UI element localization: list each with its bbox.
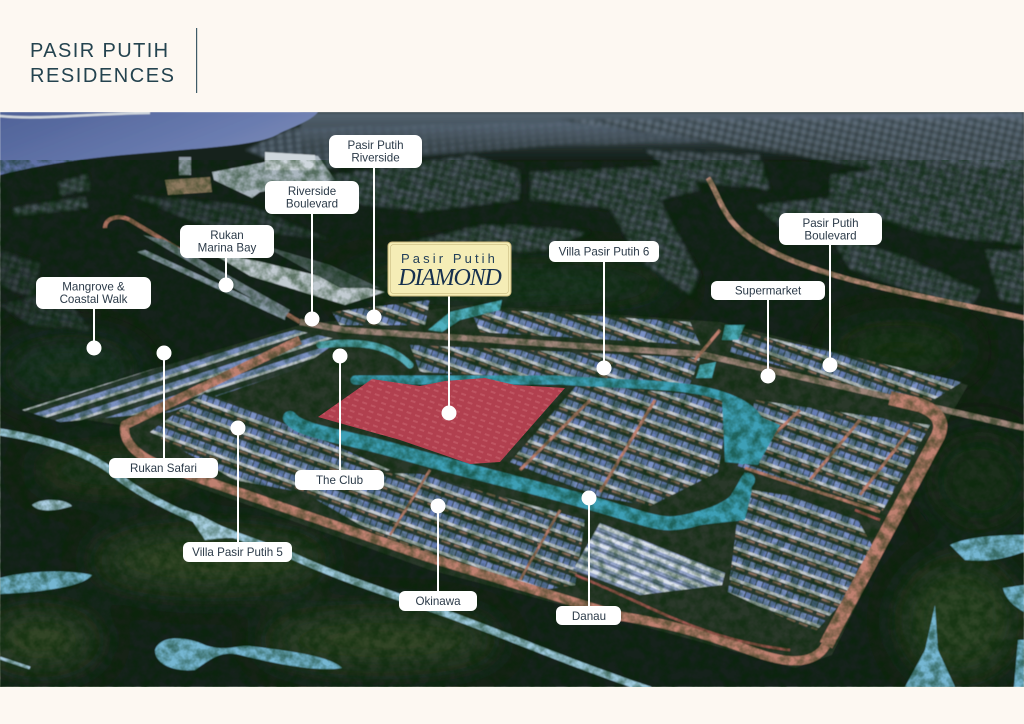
label: Rukan Marina Bay: Rukan <box>210 229 244 242</box>
label: Danau <box>556 490 621 625</box>
lighter forest glows <box>0 263 1024 680</box>
title text <box>30 40 176 87</box>
label: Mangrove & Coastal Walk: Mangrove & <box>62 280 125 294</box>
title text: RESIDENCES <box>30 65 176 87</box>
forest base <box>0 112 1024 687</box>
label: Pasir Putih Boulevard: Boulevard <box>804 230 857 242</box>
title block <box>30 28 197 93</box>
housing blocks <box>22 300 962 632</box>
label: The Club: The Club <box>316 474 363 487</box>
label: Riverside Boulevard: Riverside <box>288 185 336 198</box>
Rukan Marina Bay shops <box>218 258 385 306</box>
title text: PASIR PUTIH <box>30 40 170 62</box>
far shore highlight <box>0 113 150 117</box>
Pasir Putih Diamond red plot <box>318 378 565 464</box>
title divider <box>196 28 197 93</box>
label: Pasir Putih Riverside: Riverside <box>351 152 400 164</box>
label: Riverside Boulevard <box>265 181 359 326</box>
western feeder road <box>105 217 300 322</box>
label: Okinawa <box>399 498 477 611</box>
label: Villa Pasir Putih 6 <box>549 241 659 376</box>
label: Pasir Putih Diamond: DIAMOND <box>397 265 501 291</box>
label: Villa Pasir Putih 5 <box>183 420 292 562</box>
label: Pasir Putih Boulevard <box>779 213 882 372</box>
label: Rukan Safari: Rukan Safari <box>130 462 197 475</box>
northern feeder road <box>708 178 1024 318</box>
aerial masterplan scene <box>0 112 1024 690</box>
label: Rukan Safari <box>109 346 218 478</box>
label: Pasir Putih Riverside: Pasir Putih <box>347 139 404 152</box>
distant city <box>245 112 1024 172</box>
label: Pasir Putih Riverside <box>329 135 422 324</box>
label: Mangrove & Coastal Walk: Coastal Walk <box>60 293 128 306</box>
label: Rukan Marina Bay <box>180 225 274 292</box>
label: Villa Pasir Putih 5: Villa Pasir Putih 5 <box>192 546 283 559</box>
river <box>0 432 650 690</box>
central commercial towers <box>165 152 335 198</box>
golf ponds <box>0 500 1024 687</box>
label: Rukan Marina Bay: Marina Bay <box>198 242 257 254</box>
label: Supermarket: Supermarket <box>735 284 802 298</box>
bay water <box>0 112 318 175</box>
river bulge <box>185 510 245 540</box>
label: Danau: Danau <box>572 610 606 623</box>
label: Riverside Boulevard: Boulevard <box>286 198 338 210</box>
label: Supermarket <box>711 281 825 384</box>
label: Pasir Putih Diamond: Pasir Putih <box>401 251 498 266</box>
label: Villa Pasir Putih 6: Villa Pasir Putih 6 <box>559 246 649 258</box>
label: Pasir Putih Boulevard: Pasir Putih <box>802 217 859 230</box>
estate ground <box>22 305 968 668</box>
left shore town <box>0 174 90 300</box>
estate roads <box>125 322 1024 661</box>
mid-ground housing clusters <box>0 118 1024 330</box>
label: Mangrove & Coastal Walk <box>36 277 151 356</box>
foliage texture <box>0 160 1024 687</box>
label: Pasir Putih Diamond <box>388 242 511 420</box>
label: Okinawa: Okinawa <box>415 595 461 608</box>
lakes <box>290 343 760 523</box>
label: The Club <box>295 348 384 490</box>
